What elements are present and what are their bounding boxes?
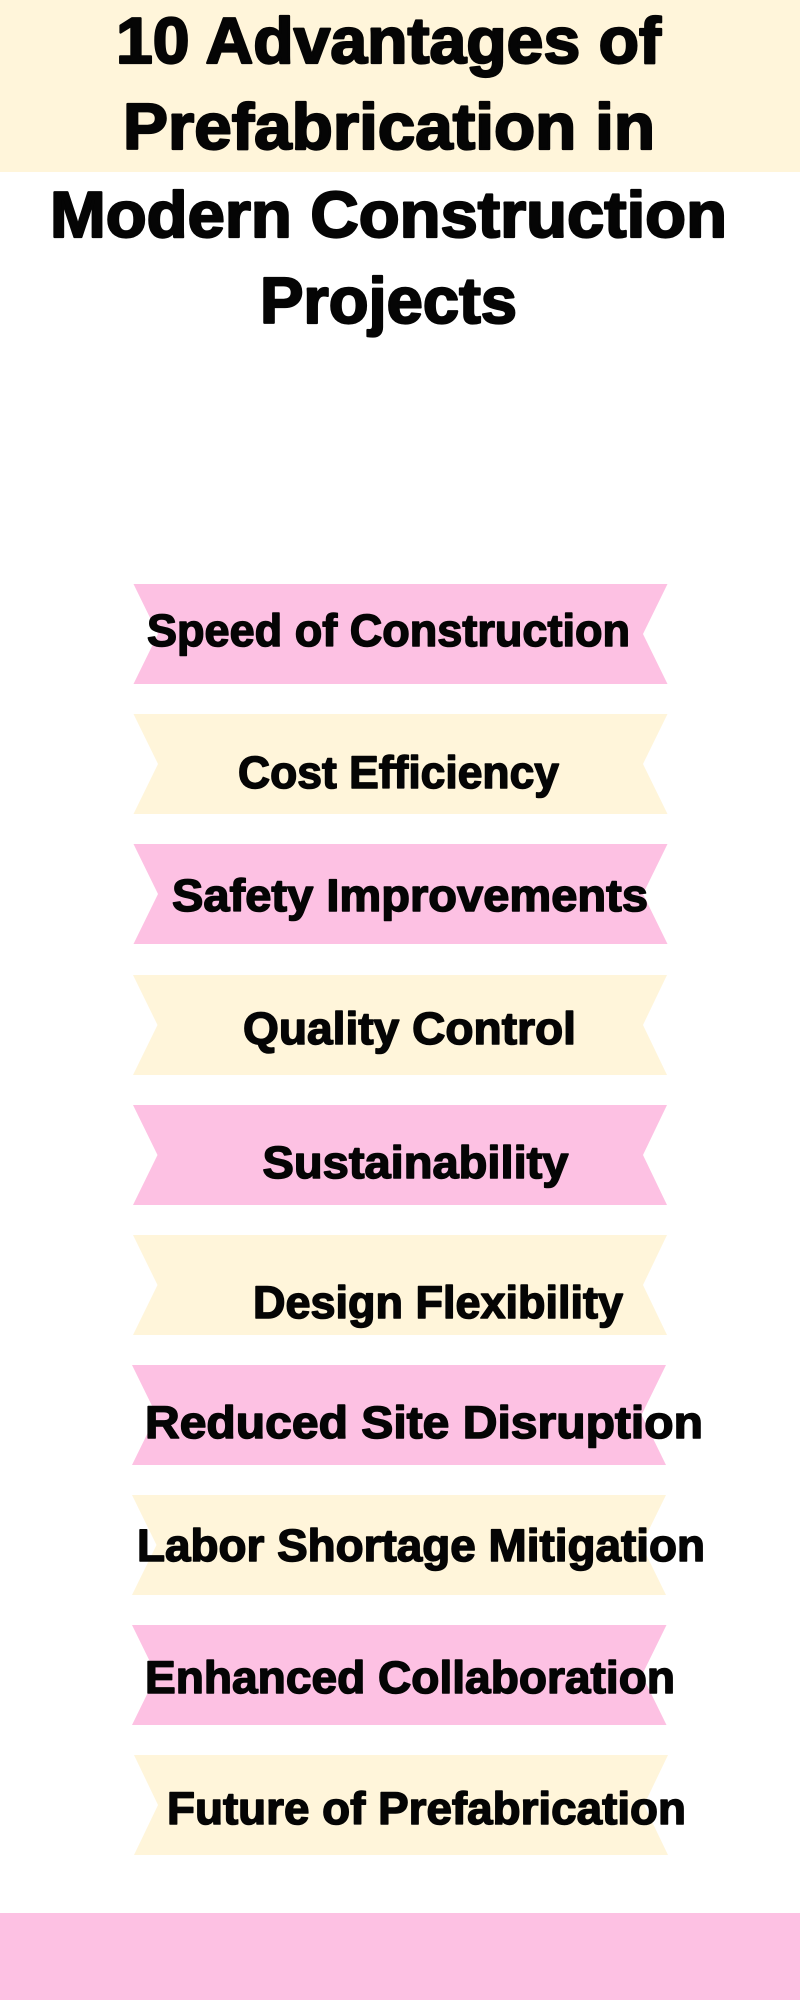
ribbon: Quality Control bbox=[133, 975, 667, 1075]
ribbon: Cost Efficiency bbox=[134, 714, 668, 814]
ribbon: Quality Control: Quality Control bbox=[243, 1003, 576, 1054]
ribbon: Cost Efficiency: Cost Efficiency bbox=[238, 747, 559, 798]
ribbon: Reduced Site Disruption bbox=[132, 1365, 703, 1465]
ribbon: Enhanced Collaboration: Enhanced Collaboration bbox=[145, 1652, 675, 1703]
ribbon: Design Flexibility: Design Flexibility bbox=[253, 1277, 623, 1328]
title: Prefabrication in bbox=[123, 90, 655, 163]
ribbon: Sustainability bbox=[133, 1105, 667, 1205]
ribbon: Enhanced Collaboration bbox=[132, 1625, 675, 1725]
title: Projects bbox=[260, 264, 517, 337]
ribbon: Design Flexibility bbox=[133, 1235, 667, 1335]
ribbon: Reduced Site Disruption: Reduced Site Disruption bbox=[145, 1397, 703, 1448]
footer band bbox=[0, 1913, 800, 2000]
ribbon: Speed of Construction: Speed of Construction bbox=[147, 605, 630, 656]
title: Modern Construction bbox=[50, 178, 727, 251]
ribbon: Sustainability: Sustainability bbox=[262, 1137, 568, 1188]
ribbon: Future of Prefabrication bbox=[134, 1755, 686, 1855]
ribbon: Future of Prefabrication: Future of Prefabrication bbox=[167, 1783, 686, 1834]
title: 10 Advantages of bbox=[116, 4, 661, 77]
header band bbox=[0, 0, 800, 172]
ribbon: Labor Shortage Mitigation: Labor Shortage Mitigation bbox=[137, 1520, 705, 1571]
ribbon: Safety Improvements bbox=[134, 844, 668, 944]
ribbon: Speed of Construction bbox=[134, 584, 668, 684]
ribbon: Safety Improvements: Safety Improvements bbox=[172, 870, 648, 921]
title bbox=[50, 4, 727, 337]
ribbon: Labor Shortage Mitigation bbox=[132, 1495, 705, 1595]
